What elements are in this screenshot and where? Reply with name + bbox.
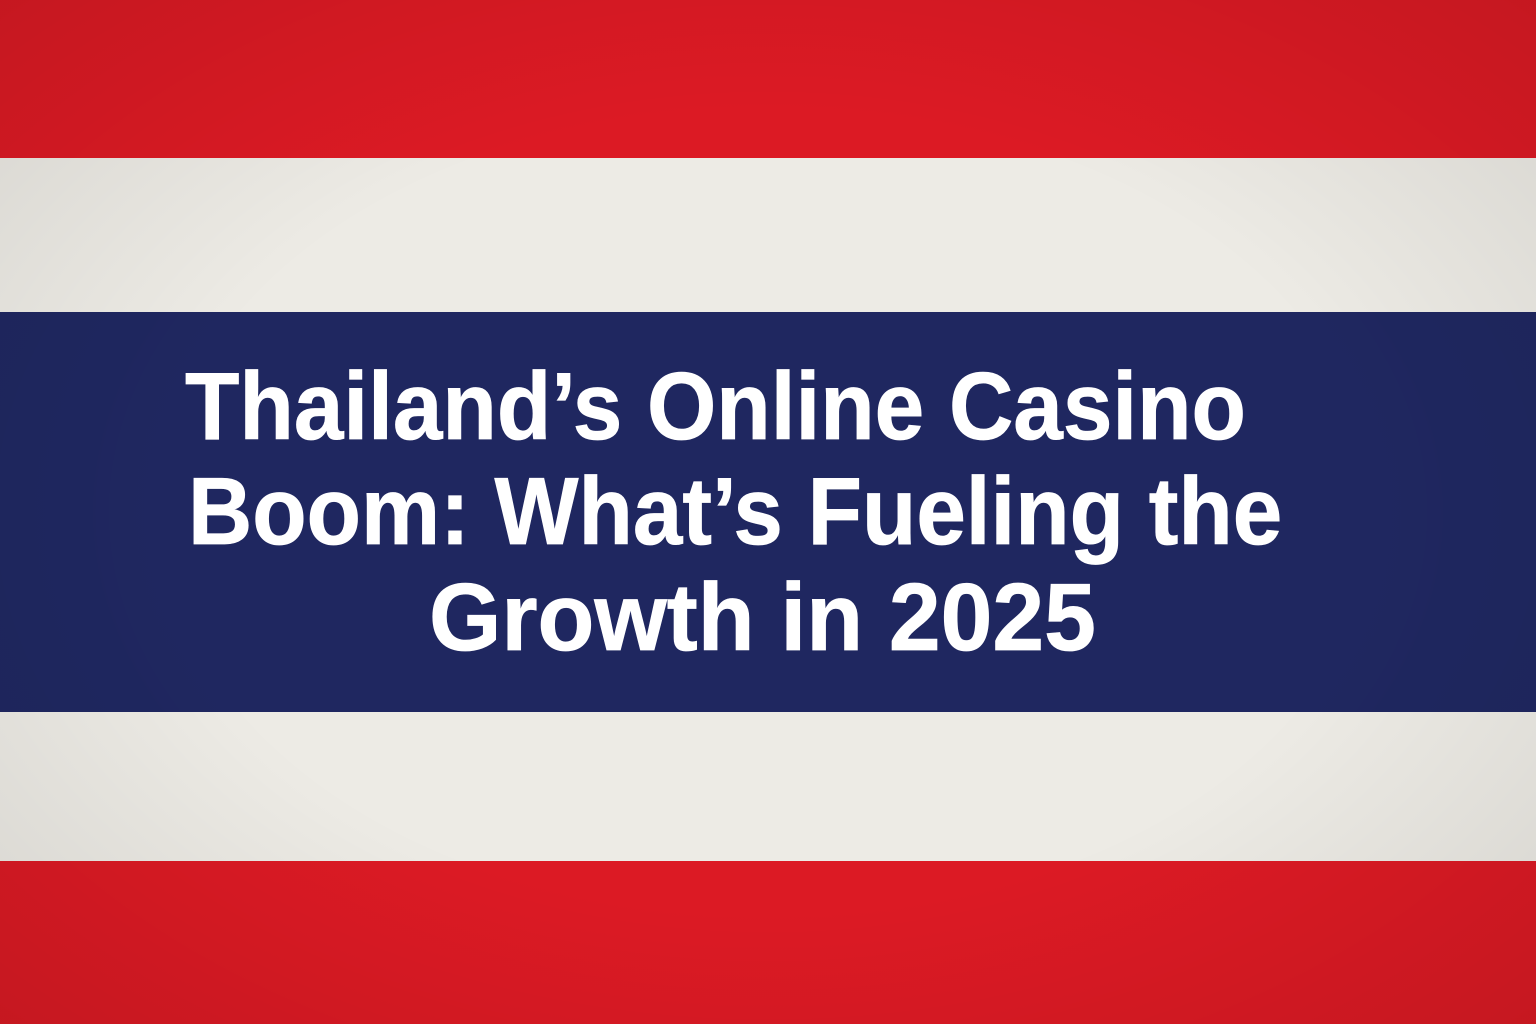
title [185,353,1282,671]
title: Boom: What’s Fueling the [188,458,1282,565]
stripe: lower white [0,712,1536,861]
title: Growth in 2025 [429,564,1096,671]
stripe: top red [0,0,1536,158]
stripe: centre blue [0,312,1536,712]
stripe: upper white [0,158,1536,312]
stripe: bottom red [0,861,1536,1024]
title: Thailand’s Online Casino [185,353,1246,460]
